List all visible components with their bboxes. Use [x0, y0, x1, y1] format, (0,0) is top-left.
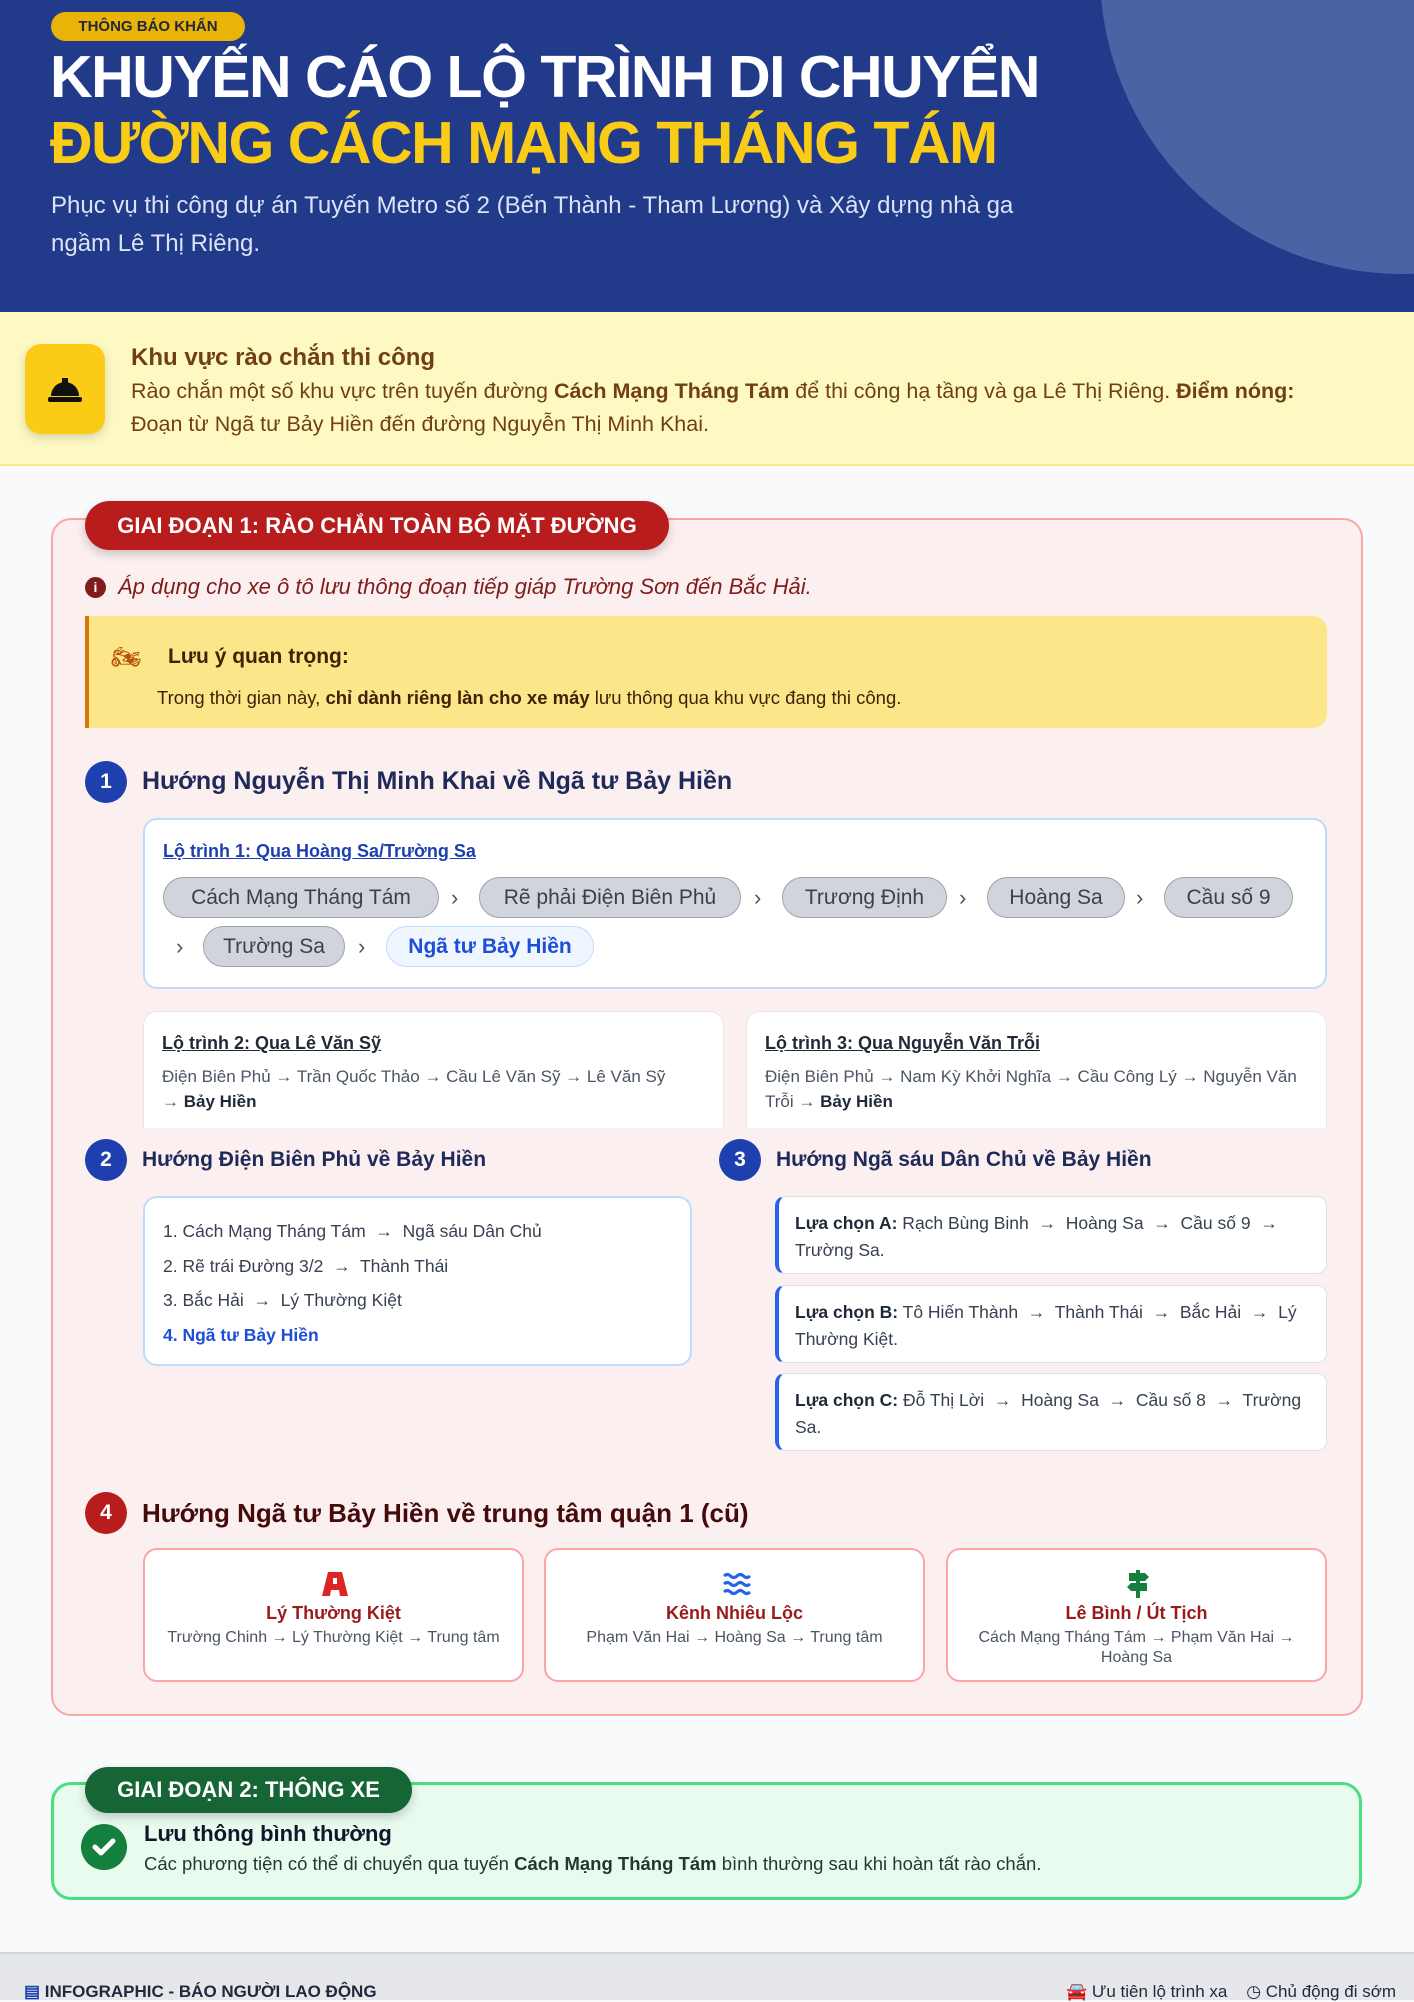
card: Lê Bình / Út Tịch: Lê Bình / Út Tịch [1066, 1603, 1208, 1623]
title [50, 44, 1039, 176]
badge: thông báo khẩn: THÔNG BÁO KHẨN [78, 18, 218, 35]
badge: stage 2 [85, 1767, 412, 1813]
decorative circle [1100, 0, 1414, 274]
title: ĐƯỜNG CÁCH MẠNG THÁNG TÁM [50, 110, 997, 176]
route 3 card: Điện Biên Phủ → Nam Kỳ Khởi Nghĩa → Cầu Công Lý → Nguyễn Văn Trỗi → Bảy Hiền [765, 1067, 1297, 1111]
footer tips: 🚘 Ưu tiên lộ trình xa ◷ Chủ động đi sớm [1066, 1982, 1396, 2001]
route 1 card: › [358, 934, 365, 959]
icon: road [322, 1572, 348, 1596]
option C [775, 1373, 1327, 1451]
stage 2 text: Lưu thông bình thường [144, 1821, 392, 1846]
option A [775, 1196, 1327, 1274]
badge: stage 2: GIAI ĐOẠN 2: THÔNG XE [117, 1777, 380, 1802]
route 1 card: › [451, 885, 458, 910]
section 3 heading: 3 [734, 1148, 746, 1171]
panel: stage 2 [51, 1782, 1362, 1900]
section 1 heading: Hướng Nguyễn Thị Minh Khai về Ngã tư Bảy Hiền [142, 767, 732, 795]
footer source: ▤ INFOGRAPHIC - BÁO NGƯỜI LAO ĐỘNG [24, 1982, 377, 2001]
section 2 list card: 2. Rẽ trái Đường 3/2 → Thành Thái [163, 1256, 448, 1276]
icon: check [81, 1824, 127, 1870]
zone text: Rào chắn một số khu vực trên tuyến đường Cách Mạng Tháng Tám để thi công hạ tầng và ga Lê Thị Riêng. Điểm nóng: Đoạn từ Ngã tư Bảy Hiền đến đường Nguyễn Thị Minh Khai. [131, 379, 1294, 436]
zone text [131, 343, 1294, 436]
section 4 heading [85, 1492, 749, 1534]
section 3 heading: Hướng Ngã sáu Dân Chủ về Bảy Hiền [776, 1148, 1152, 1171]
section 1 heading [85, 761, 732, 803]
route 1 card: Cách Mạng Tháng Tám [191, 886, 411, 909]
stage 2 text: Các phương tiện có thể di chuyển qua tuyến Cách Mạng Tháng Tám bình thường sau khi hoàn tất rào chắn. [144, 1853, 1041, 1874]
route 1 card: Trường Sa [223, 935, 325, 958]
info line: Áp dụng cho xe ô tô lưu thông đoạn tiếp giáp Trường Sơn đến Bắc Hải. [118, 574, 812, 599]
header [0, 0, 1414, 312]
callout: important note [85, 616, 1327, 728]
section 2 heading: Hướng Điện Biên Phủ về Bảy Hiền [142, 1148, 486, 1171]
route 1 card: Rẽ phải Điện Biên Phủ [504, 886, 716, 909]
section 4 heading: Hướng Ngã tư Bảy Hiền về trung tâm quận 1 (cũ) [142, 1498, 749, 1528]
route 1 card: › [754, 885, 761, 910]
badge: thông báo khẩn [51, 12, 245, 41]
route 1 card: › [1136, 885, 1143, 910]
card: Kênh Nhiêu Lộc: Kênh Nhiêu Lộc [666, 1603, 803, 1623]
section 2 list card: 1. Cách Mạng Tháng Tám → Ngã sáu Dân Chủ [163, 1221, 542, 1241]
route 2 card: Điện Biên Phủ → Trần Quốc Thảo → Cầu Lê Văn Sỹ → Lê Văn Sỹ → Bảy Hiền [162, 1067, 665, 1111]
icon: signpost [1127, 1570, 1149, 1598]
route 1 card: Trương Định [805, 886, 924, 909]
section 2 heading [85, 1139, 486, 1181]
badge: stage 1: GIAI ĐOẠN 1: RÀO CHẮN TOÀN BỘ MẶT ĐƯỜNG [117, 513, 637, 538]
route 1 card: Ngã tư Bảy Hiền [408, 935, 572, 958]
card: Lê Bình / Út Tịch [946, 1548, 1327, 1682]
section 3 heading [719, 1139, 1152, 1181]
route 1 card: Cầu số 9 [1186, 886, 1271, 909]
card: Lý Thường Kiệt: Trường Chinh → Lý Thường Kiệt → Trung tâm [167, 1629, 500, 1646]
route 1 card: Lộ trình 1: Qua Hoàng Sa/Trường Sa [163, 841, 476, 861]
route 1 card [143, 818, 1327, 989]
option B: Lựa chọn B: Tô Hiến Thành → Thành Thái → Bắc Hải → Lý Thường Kiệt. [795, 1302, 1297, 1349]
info line: i [94, 579, 97, 595]
route 1 card: › [959, 885, 966, 910]
card: Lê Bình / Út Tịch: Cách Mạng Tháng Tám → Phạm Văn Hai → Hoàng Sa [978, 1629, 1294, 1666]
route 2 card [143, 1011, 724, 1128]
route 1 card: › [176, 934, 183, 959]
icon: motorbike: 🏍 [111, 644, 141, 671]
zone text: Khu vực rào chắn thi công [131, 344, 435, 371]
route 3 card: Lộ trình 3: Qua Nguyễn Văn Trỗi [765, 1033, 1040, 1053]
card: Kênh Nhiêu Lộc [544, 1548, 925, 1682]
option B [775, 1285, 1327, 1363]
title: KHUYẾN CÁO LỘ TRÌNH DI CHUYỂN [50, 44, 1039, 110]
section 1 heading: 1 [100, 770, 112, 793]
section 2 heading: 2 [100, 1148, 112, 1171]
callout: important note: Trong thời gian này, chỉ dành riêng làn cho xe máy lưu thông qua khu vực đang thi công. [157, 687, 901, 708]
badge: stage 1 [85, 501, 669, 550]
route 1 card: Hoàng Sa [1009, 886, 1103, 909]
route 3 card [746, 1011, 1327, 1128]
construction zone banner [0, 312, 1414, 466]
callout: important note: Lưu ý quan trọng: [168, 645, 349, 668]
card: Lý Thường Kiệt [143, 1548, 524, 1682]
panel: stage 1 [51, 518, 1363, 1716]
subtitle: Phục vụ thi công dự án Tuyến Metro số 2 (Bến Thành - Tham Lương) và Xây dựng nhà ga ngầm Lê Thị Riêng. [51, 192, 1013, 257]
section 2 list card [143, 1196, 692, 1366]
card: Kênh Nhiêu Lộc: Phạm Văn Hai → Hoàng Sa → Trung tâm [586, 1629, 883, 1646]
section 2 list card: 3. Bắc Hải → Lý Thường Kiệt [163, 1290, 402, 1310]
stage 2 text [144, 1821, 1041, 1874]
section 4 heading: 4 [100, 1501, 112, 1524]
option C: Lựa chọn C: Đỗ Thị Lời → Hoàng Sa → Cầu số 8 → Trường Sa. [795, 1390, 1301, 1437]
icon: water [723, 1572, 751, 1596]
option A: Lựa chọn A: Rạch Bùng Binh → Hoàng Sa → Cầu số 9 → Trường Sa. [795, 1213, 1278, 1260]
icon: helmet [25, 344, 105, 434]
section 2 list card: 4. Ngã tư Bảy Hiền [163, 1325, 319, 1345]
route 2 card: Lộ trình 2: Qua Lê Văn Sỹ [162, 1033, 381, 1053]
card: Lý Thường Kiệt: Lý Thường Kiệt [266, 1603, 401, 1623]
footer [0, 1952, 1414, 2000]
